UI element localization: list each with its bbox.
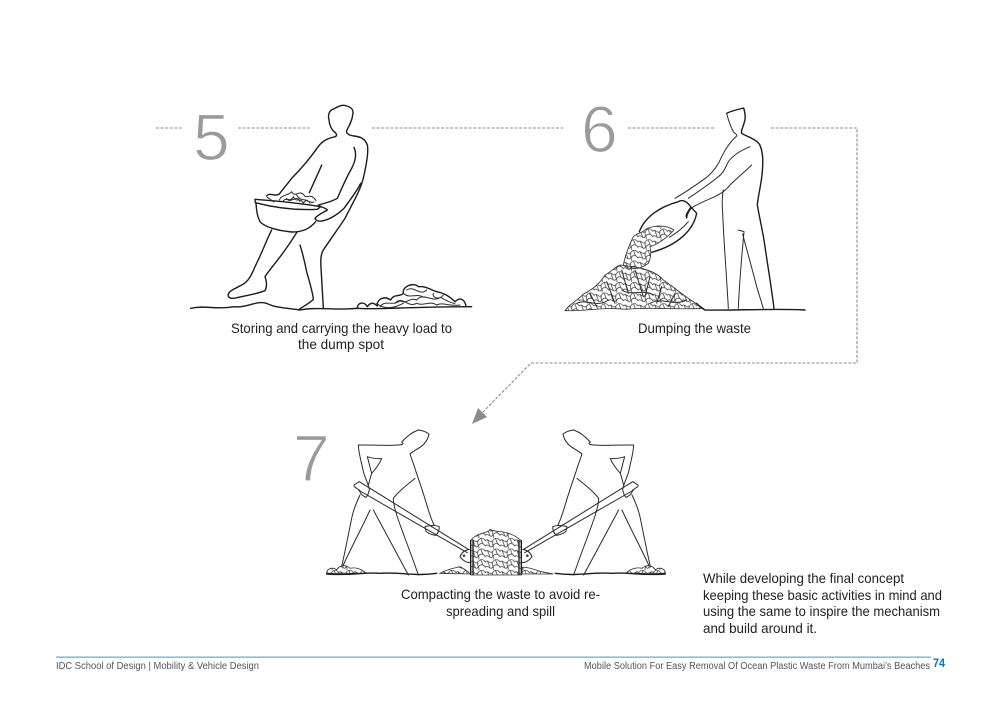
dashed connector path with arrow	[156, 128, 857, 424]
footer left label: IDC School of Design | Mobility & Vehicle Design	[56, 661, 259, 672]
illustration: man dumping waste from basin	[565, 108, 805, 311]
small waste pile	[357, 285, 466, 308]
illustration: waste compacted in cage	[440, 529, 553, 575]
illustration: left man compacting waste	[327, 430, 470, 575]
page number: 74	[933, 658, 946, 670]
concept note text block: using the same to inspire the mechanism	[703, 603, 940, 619]
caption: step 5: the dump spot	[298, 336, 384, 352]
step number 7: 7	[293, 421, 330, 495]
illustration: man carrying basin of waste	[191, 105, 472, 310]
caption: step 6: Dumping the waste	[638, 320, 751, 336]
caption: step 5: Storing and carrying the heavy load to	[231, 320, 452, 336]
caption: step 7: spreading and spill	[446, 603, 555, 619]
footer project title: Mobile Solution For Easy Removal Of Ocean Plastic Waste From Mumbai’s Beaches	[584, 661, 930, 672]
step number 6: 6	[581, 92, 618, 166]
concept note text block: and build around it.	[703, 620, 817, 636]
caption: step 7: Compacting the waste to avoid re-	[401, 586, 600, 602]
concept note text block: keeping these basic activities in mind and	[703, 587, 942, 603]
ground line	[191, 303, 472, 310]
step number 5: 5	[193, 100, 230, 174]
pouring waste	[623, 226, 674, 269]
illustration: right man compacting waste	[522, 430, 665, 575]
dumped waste pile	[565, 265, 703, 311]
concept note text block: While developing the final concept	[703, 570, 904, 586]
footer	[56, 656, 946, 672]
